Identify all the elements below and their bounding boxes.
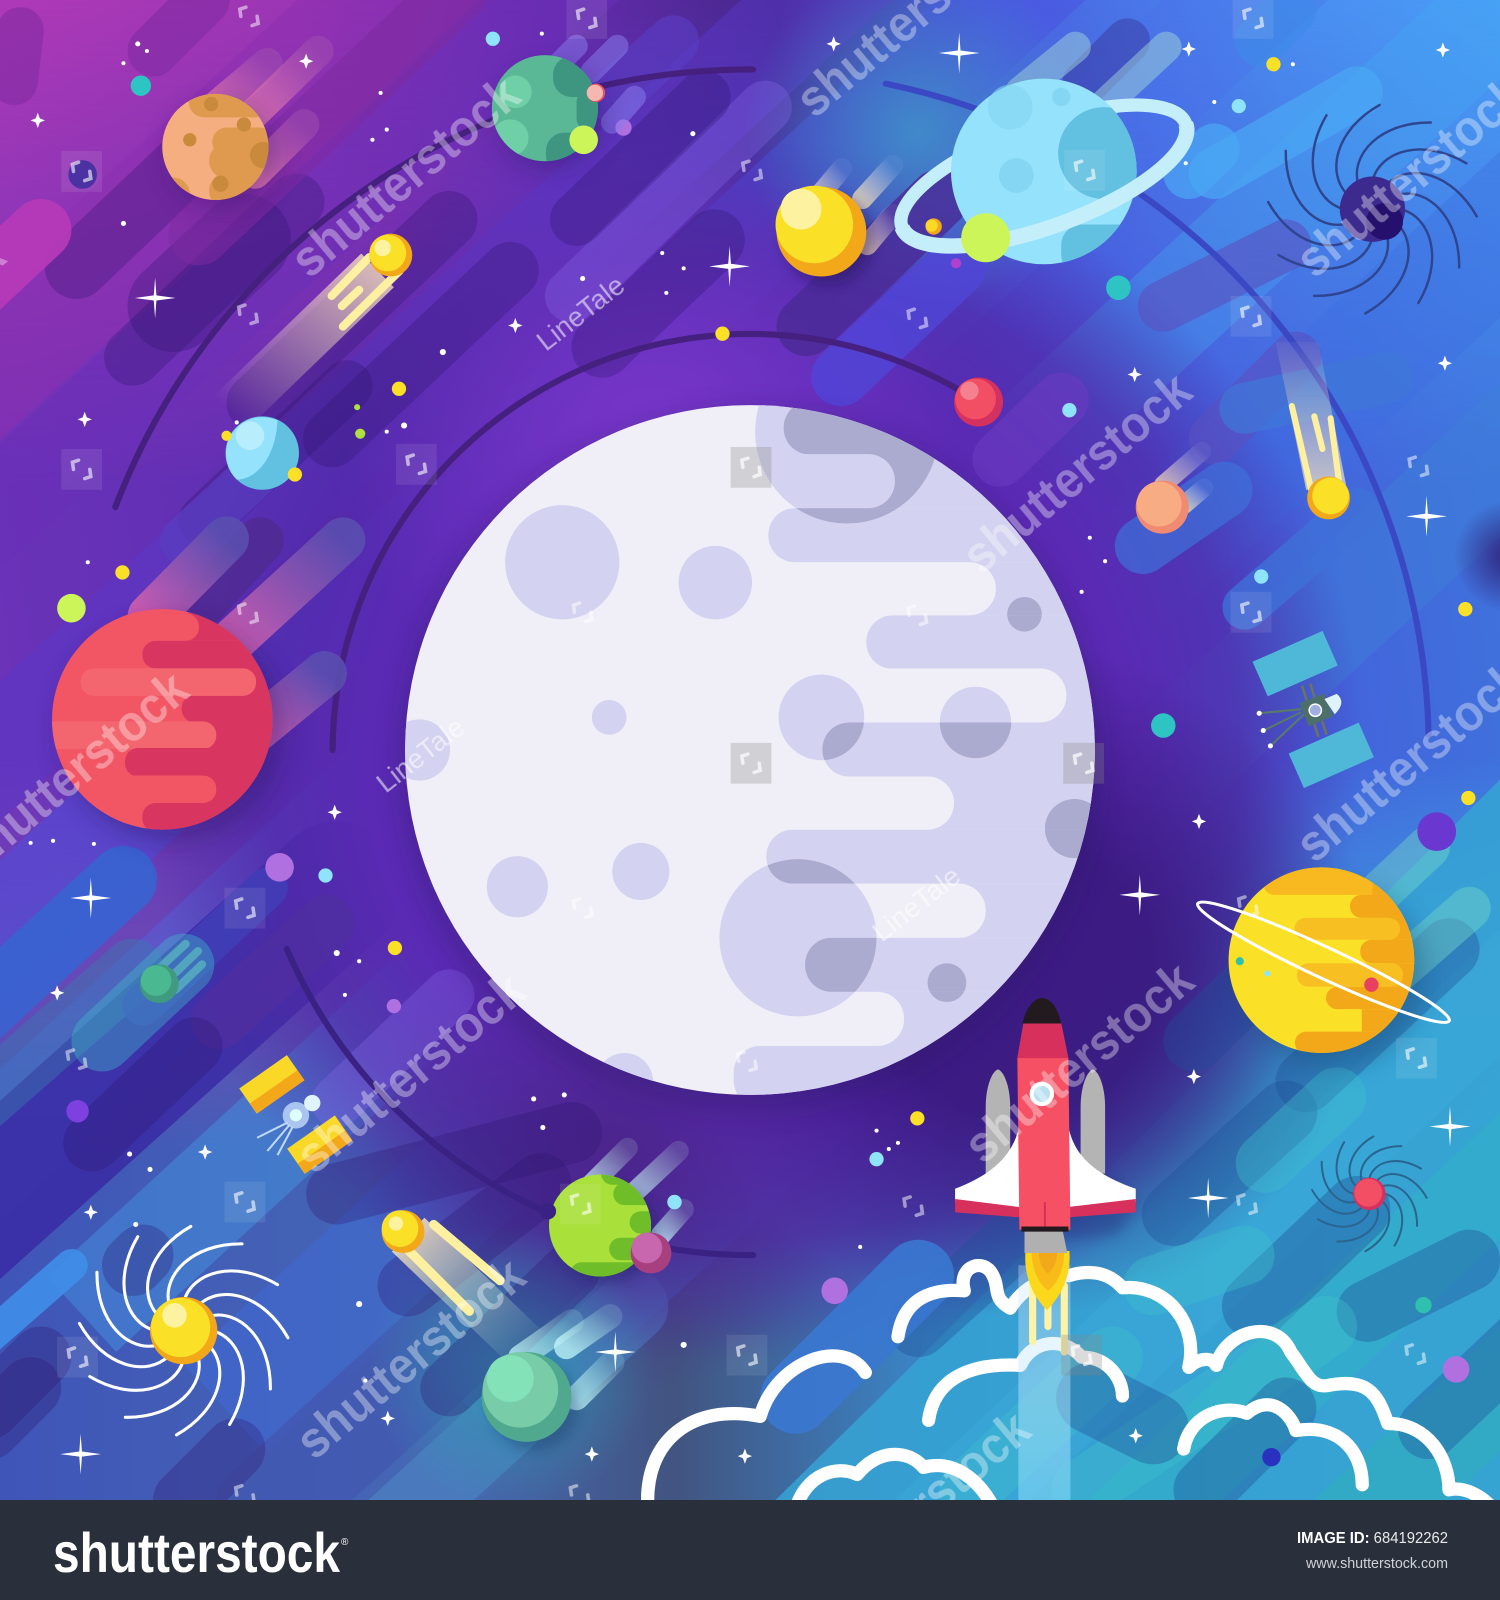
small white dots <box>29 32 1295 1383</box>
planet: purple <box>1417 812 1456 851</box>
watermark: LineTale: LineTale <box>866 860 966 948</box>
planet: yellow ringed <box>1191 847 1469 1067</box>
moon <box>388 388 1112 1112</box>
comet: small green <box>140 944 202 1003</box>
satellite: yellow <box>239 1055 352 1174</box>
comet: vertical right <box>1276 342 1350 519</box>
clouds <box>648 1266 1500 1520</box>
planet: orange <box>157 51 318 210</box>
watermark: shutterstock repeated: shutterstock <box>285 960 536 1184</box>
cyan lower-right bands <box>1122 1282 1500 1500</box>
planet: red <box>31 539 343 842</box>
yellow ball planet <box>776 165 893 285</box>
galaxy: red <box>1308 1133 1431 1255</box>
planet: lime green <box>540 1148 684 1284</box>
cyan lower-right field <box>776 780 1500 1500</box>
planet: green <box>492 46 635 173</box>
watermark: shutterstock repeated: shutterstock <box>285 1246 536 1470</box>
star near orange planet <box>299 54 313 69</box>
coloured dots <box>57 32 1476 1209</box>
watermark: LineTale: LineTale <box>531 269 630 357</box>
watermark: shutterstock repeated: shutterstock <box>951 360 1202 584</box>
ringed planet: blue <box>885 47 1203 276</box>
deep indigo and slate bands <box>0 880 633 1531</box>
comet: yellow bottom <box>382 1210 536 1357</box>
rocket boosters <box>986 1069 1105 1173</box>
watermark: shutterstock repeated: shutterstock <box>280 64 531 288</box>
rocket wings <box>955 1120 1136 1217</box>
rocket exhaust <box>1025 1251 1070 1352</box>
planet: small red <box>954 378 1003 427</box>
watermark: LineTale: LineTale <box>370 711 470 799</box>
orbit lines <box>115 69 1429 1255</box>
footer registered mark: ® <box>341 1537 349 1548</box>
footer logo: shutterstock <box>53 1521 341 1584</box>
footer url: www.shutterstock.com <box>1305 1555 1448 1572</box>
rocket <box>955 998 1138 1505</box>
footer bar <box>0 1500 1500 1600</box>
watermark: shutterstock repeated: shutterstock <box>953 950 1204 1174</box>
comet: yellow top-left <box>230 234 412 413</box>
galaxy: yellow with white arms <box>73 1219 295 1442</box>
rocket body <box>1017 1023 1070 1230</box>
satellite: blue <box>1253 631 1374 788</box>
planet: light blue small <box>221 416 302 490</box>
moon craters and bands <box>388 388 1112 1112</box>
galaxy: dark top right <box>1261 98 1484 320</box>
watermark: LineTale <box>370 269 966 948</box>
footer image id: IMAGE ID: 684192262 <box>1297 1530 1448 1547</box>
comet: peach <box>1136 451 1204 534</box>
planet: mint <box>482 1316 612 1451</box>
